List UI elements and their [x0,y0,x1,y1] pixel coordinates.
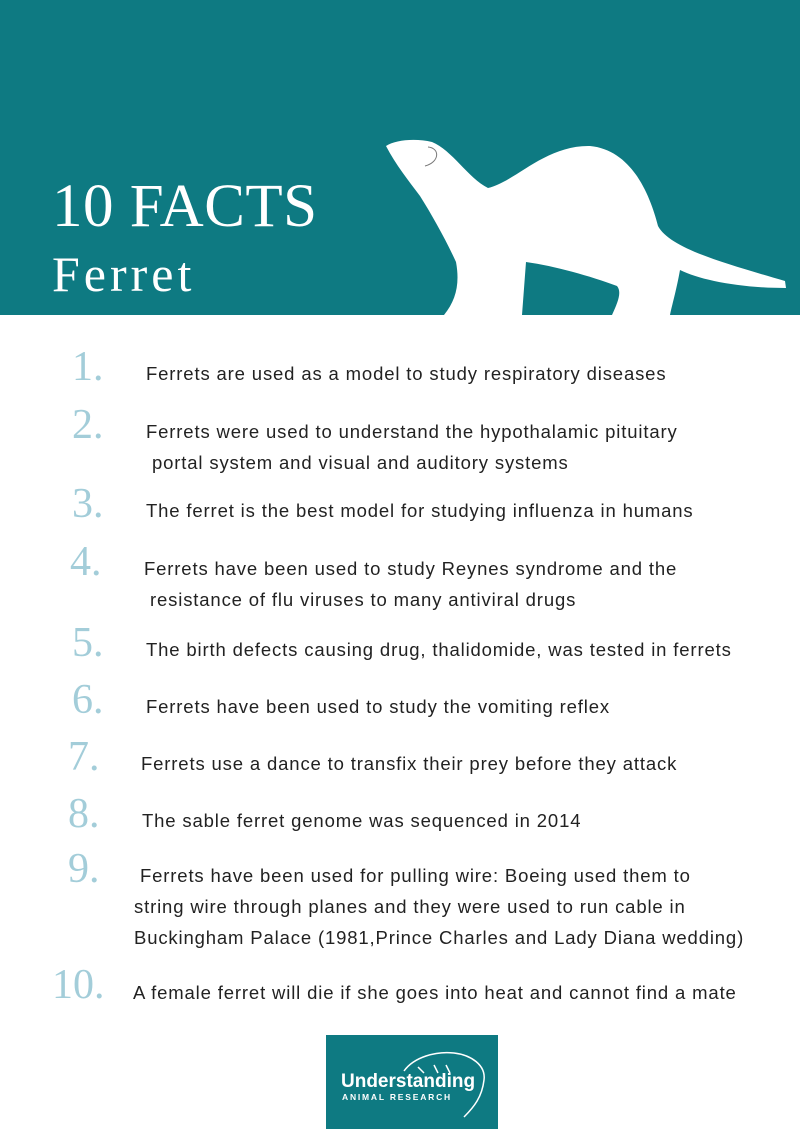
fact list: 7. [68,734,100,780]
fact 4 [70,539,677,610]
fact list: Ferrets have been used to study Reynes syndrome and the [144,558,677,579]
fact 8 [68,791,581,837]
logo: Understanding Animal Research: ANIMAL RESEARCH [342,1092,452,1102]
header banner [0,0,800,315]
fact 9 [68,846,744,948]
fact list: 1. [72,344,104,390]
fact 2 [72,402,678,473]
fact list: 10. [52,962,104,1008]
fact list: Ferrets use a dance to transfix their prey before they attack [141,753,677,774]
fact list: Ferrets were used to understand the hypothalamic pituitary [146,421,678,442]
fact list: 9. [68,846,100,892]
fact 5 [72,620,732,666]
logo mouse outline [403,1052,485,1118]
fact list: 3. [72,481,104,527]
fact list: string wire through planes and they were used to run cable in [134,896,686,917]
fact list: Ferrets have been used to study the vomiting reflex [146,696,610,717]
fact list: 8. [68,791,100,837]
fact list: portal system and visual and auditory systems [152,452,569,473]
fact list: 5. [72,620,104,666]
title: 10 FACTS [52,173,318,240]
fact list: resistance of flu viruses to many antiviral drugs [150,589,576,610]
fact list: A female ferret will die if she goes into heat and cannot find a mate [133,982,737,1003]
fact list: 6. [72,677,104,723]
fact list: Ferrets have been used for pulling wire: Boeing used them to [140,865,691,886]
fact 3 [72,481,694,527]
logo text: Understanding [341,1071,475,1092]
fact 1 [72,344,666,390]
fact list: Ferrets are used as a model to study respiratory diseases [146,363,666,384]
fact list: 2. [72,402,104,448]
fact list: The sable ferret genome was sequenced in 2014 [142,810,581,831]
icon: ferret silhouette [386,140,786,315]
fact list: The birth defects causing drug, thalidomide, was tested in ferrets [146,639,732,660]
fact list: Buckingham Palace (1981,Prince Charles and Lady Diana wedding) [134,927,744,948]
fact 6 [72,677,610,723]
subtitle: Ferret [52,246,195,302]
fact list: The ferret is the best model for studying influenza in humans [146,500,694,521]
logo: Understanding Animal Research [326,1035,498,1129]
fact 7 [68,734,677,780]
fact 10 [52,962,737,1008]
fact list [52,344,744,1008]
fact list: 4. [70,539,102,585]
